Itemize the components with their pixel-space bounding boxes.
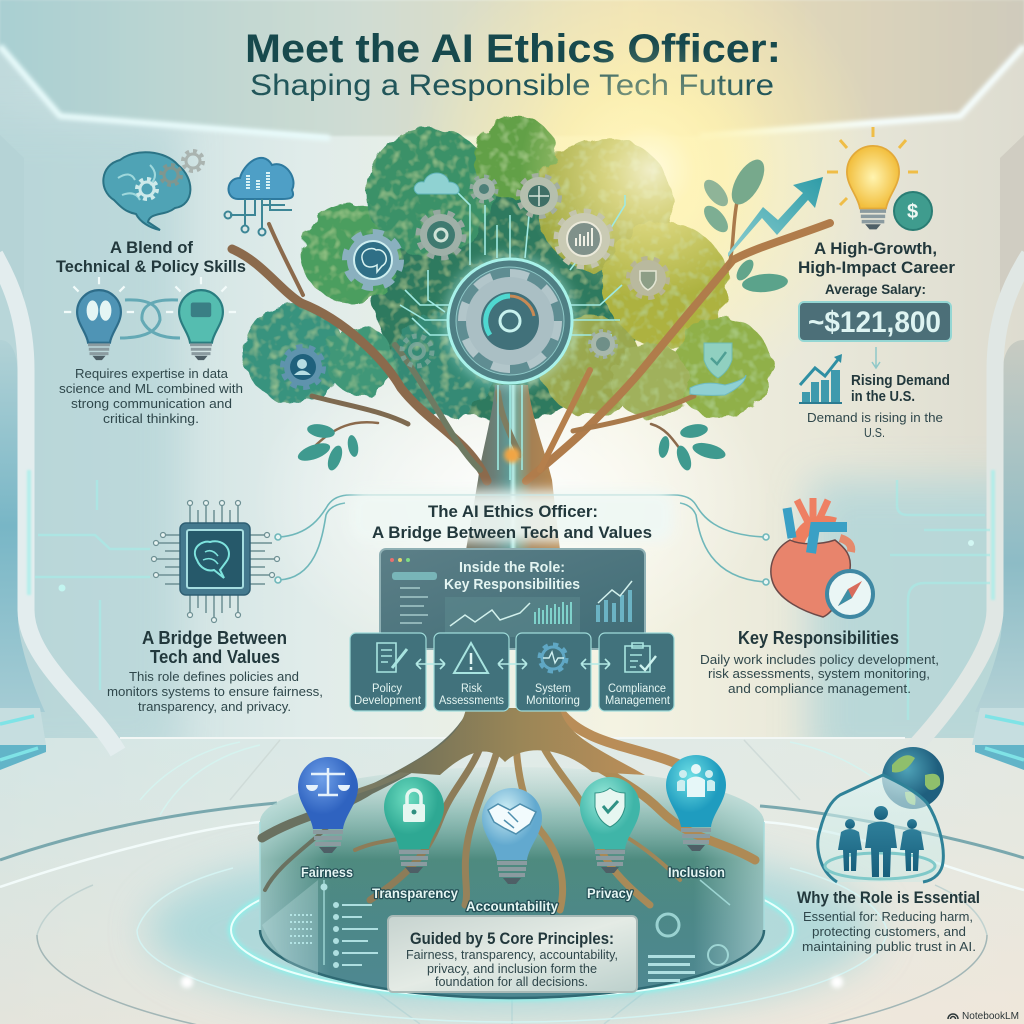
trunk glow node bbox=[504, 447, 520, 463]
text: bridge description: monitors systems to ensure fairness, bbox=[107, 684, 323, 699]
text: why description: maintaining public trust in AI. bbox=[802, 939, 976, 954]
icon: growth arrow bbox=[728, 177, 823, 257]
gear: small top bbox=[472, 177, 496, 201]
principle: transparency bbox=[372, 777, 458, 901]
gear: shield bbox=[629, 259, 667, 297]
heading: key responsibilities: Key Responsibilities bbox=[738, 628, 899, 648]
card: policy development: Policy bbox=[372, 683, 402, 695]
principle: transparency: Transparency bbox=[372, 886, 458, 901]
panel: high-growth career bbox=[798, 127, 955, 440]
heading: bridge: A Bridge Between bbox=[142, 628, 287, 648]
gear: settings bbox=[419, 213, 463, 257]
plaque: guided by 5 core principles: Guided by 5 Core Principles: bbox=[410, 929, 614, 948]
card: compliance management: Management bbox=[605, 695, 671, 707]
panel: why the role is essential bbox=[797, 747, 980, 954]
text: responsibilities description: risk assessments, system monitoring, bbox=[708, 666, 930, 681]
principle: accountability bbox=[466, 788, 558, 914]
bridge connector lines bbox=[275, 495, 769, 585]
tree leaves bbox=[296, 422, 727, 472]
heading: bridge between tech and values: A Bridge Between Tech and Values bbox=[372, 523, 652, 542]
tree trunk bbox=[466, 385, 560, 640]
text: skills description bbox=[59, 366, 243, 426]
text: demand description: U.S. bbox=[864, 425, 885, 440]
heading: blend of skills: A Blend of bbox=[110, 238, 193, 257]
heading: bridge between tech and values bbox=[372, 502, 652, 542]
arrows between cards bbox=[416, 659, 610, 669]
icon: cloud with circuit bbox=[224, 158, 294, 236]
card: policy development bbox=[350, 633, 426, 711]
icon: dollar coin bbox=[894, 192, 932, 230]
gear: globe small bbox=[590, 331, 616, 357]
principle: inclusion: Inclusion bbox=[668, 865, 725, 880]
heading: career: A High-Growth, bbox=[814, 239, 937, 258]
text: bridge description: transparency, and privacy. bbox=[138, 699, 291, 714]
card: system monitoring bbox=[516, 633, 591, 711]
panel: inside the role dashboard bbox=[350, 549, 674, 711]
text: demand description: Demand is rising in the bbox=[807, 410, 943, 425]
main title: Meet the AI Ethics Officer: bbox=[245, 27, 781, 71]
card: system monitoring: System bbox=[535, 683, 571, 695]
glass platform cylinder bbox=[260, 767, 764, 998]
main title: Shaping a Responsible Tech Future bbox=[250, 69, 774, 102]
principle: accountability: Accountability bbox=[466, 899, 558, 914]
icon: heart with compass bbox=[771, 498, 873, 617]
shield and hand icon bbox=[690, 343, 746, 395]
plaque: guided by 5 core principles bbox=[388, 916, 637, 992]
panel: technical and policy skills bbox=[56, 151, 294, 426]
icon: AI chip bbox=[152, 500, 280, 622]
text: skills description: Requires expertise in data bbox=[75, 366, 229, 381]
heading: career bbox=[798, 239, 955, 277]
heading: blend of skills bbox=[56, 238, 246, 276]
text: rising demand: Rising Demand bbox=[851, 372, 950, 389]
text: skills description: critical thinking. bbox=[103, 411, 199, 426]
heading: why essential: Why the Role is Essential bbox=[797, 888, 980, 907]
text: responsibilities description: and compliance management. bbox=[728, 681, 911, 696]
card: compliance management: Compliance bbox=[608, 683, 666, 695]
text: demand description bbox=[807, 410, 943, 440]
gear: left lower bbox=[402, 336, 432, 366]
NotebookLM watermark: NotebookLM bbox=[962, 1010, 1019, 1022]
text: rising demand bbox=[851, 372, 950, 405]
icon: rising bar chart bbox=[799, 354, 842, 403]
principle: privacy bbox=[580, 777, 640, 901]
principle: inclusion bbox=[666, 755, 726, 880]
principle: privacy: Privacy bbox=[587, 886, 633, 901]
platform interface details bbox=[262, 880, 730, 982]
plaque: guided by 5 core principles: Fairness, transparency, accountability, bbox=[406, 948, 618, 962]
main title bbox=[245, 27, 781, 102]
icon: interlocking arrows bbox=[120, 300, 180, 338]
gear: brain bbox=[346, 233, 400, 287]
icon: dollar coin: $ bbox=[907, 201, 918, 223]
text: bridge description: This role defines policies and bbox=[129, 669, 299, 684]
heading: blend of skills: Technical & Policy Skills bbox=[56, 257, 246, 276]
heading: inside the role: Inside the Role: bbox=[459, 559, 565, 576]
gear: chart bbox=[557, 212, 611, 266]
icon: brain with gears bbox=[103, 151, 203, 230]
plaque: guided by 5 core principles: privacy, and inclusion form the bbox=[427, 962, 597, 976]
panel: bridge between tech and values bbox=[107, 500, 323, 714]
heading: career: High-Impact Career bbox=[798, 258, 955, 277]
central gear bbox=[444, 255, 576, 387]
tree branches bbox=[232, 175, 830, 481]
gear: person bbox=[283, 347, 323, 387]
principle: fairness: Fairness bbox=[301, 865, 353, 880]
cloud icon in canopy bbox=[414, 173, 459, 194]
label: average salary: Average Salary: bbox=[825, 281, 926, 297]
heading: bridge bbox=[142, 628, 287, 667]
tree canopy bbox=[244, 116, 772, 420]
plaque: guided by 5 core principles: foundation for all decisions. bbox=[435, 975, 588, 989]
text: rising demand: in the U.S. bbox=[851, 388, 915, 405]
tree illustration bbox=[232, 40, 830, 640]
card: policy development: Development bbox=[354, 695, 422, 707]
arrow: down bbox=[872, 347, 880, 368]
glow behind bridge heading bbox=[350, 490, 674, 542]
gear: globe bbox=[519, 176, 559, 216]
root trunk base bbox=[395, 708, 645, 775]
panel: core principles bbox=[298, 755, 726, 992]
heading: bridge between tech and values: The AI Ethics Officer: bbox=[428, 502, 598, 521]
text: why description bbox=[802, 909, 976, 954]
text: skills description: science and ML combined with bbox=[59, 381, 243, 396]
tree roots bbox=[262, 712, 755, 910]
heading: inside the role bbox=[444, 559, 580, 593]
text: why description: protecting customers, and bbox=[812, 924, 966, 939]
icon: chat bulb bbox=[166, 277, 236, 360]
icon: yellow bulb bbox=[827, 127, 918, 229]
salary callout: ~$121,800 bbox=[808, 306, 941, 339]
icon: brain bulb bbox=[64, 277, 134, 360]
card: risk assessments bbox=[434, 633, 509, 711]
card: risk assessments: Risk bbox=[461, 683, 482, 695]
heading: bridge: Tech and Values bbox=[150, 647, 280, 667]
text: skills description: strong communication and bbox=[71, 396, 232, 411]
text: responsibilities description: Daily work includes policy development, bbox=[700, 652, 939, 667]
dashboard screen bbox=[380, 549, 645, 649]
principle: fairness bbox=[298, 757, 358, 880]
text: why description: Essential for: Reducing harm, bbox=[803, 909, 973, 924]
text: responsibilities description bbox=[700, 652, 939, 696]
right branch leaves bbox=[700, 154, 789, 294]
text: bridge description bbox=[107, 669, 323, 714]
heading: inside the role: Key Responsibilities bbox=[444, 576, 580, 593]
icon: dome with globe and people bbox=[818, 747, 944, 882]
card: risk assessments: Assessments bbox=[439, 695, 504, 707]
tree circuit traces bbox=[400, 190, 625, 480]
panel: key responsibilities right bbox=[700, 498, 939, 696]
card: compliance management bbox=[599, 633, 674, 711]
card: system monitoring: Monitoring bbox=[526, 695, 580, 707]
